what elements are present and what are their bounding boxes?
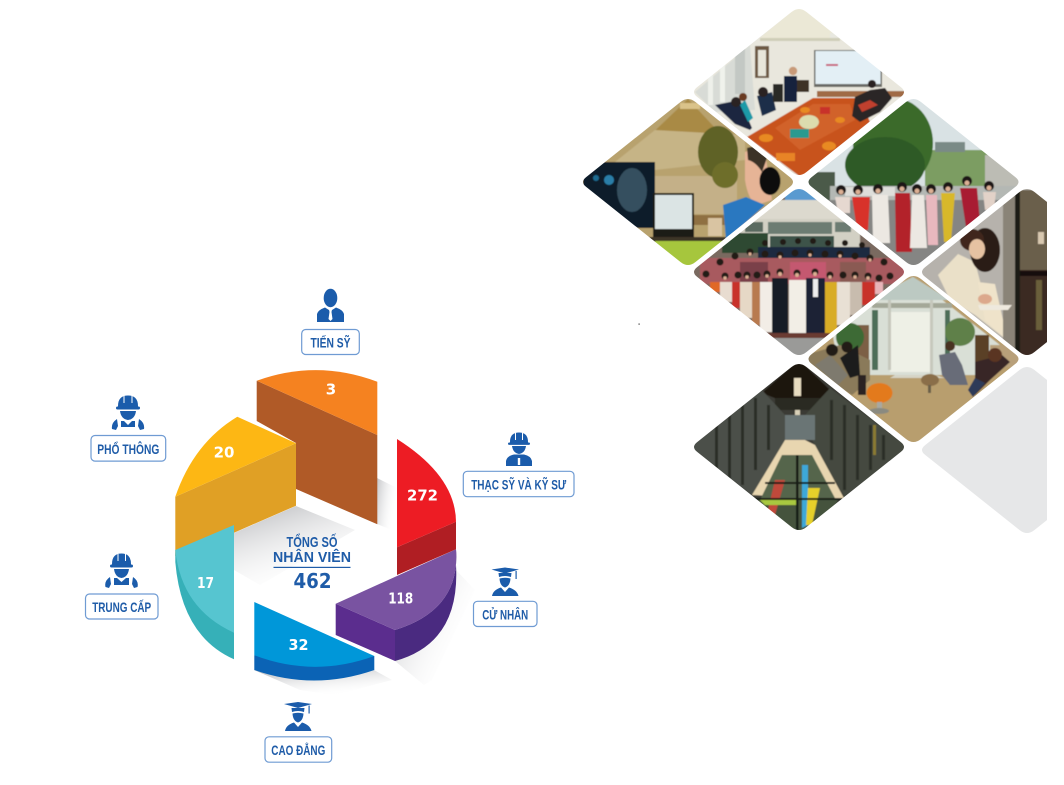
photo collage [583, 9, 1047, 533]
center total: NHÂN VIÊN [273, 548, 351, 566]
photo: staff group portrait [690, 185, 910, 360]
photo: meeting room [694, 9, 904, 175]
label: TIẾN SỸ [310, 334, 351, 350]
label: PHỔ THÔNG [97, 440, 159, 457]
segment: Trung cấp (teal) [175, 525, 234, 659]
label: CAO ĐẲNG [271, 741, 325, 758]
category: Cao đẳng [265, 702, 332, 762]
icon: graduate with cap [284, 702, 312, 731]
segment: Phổ thông (yellow) [175, 417, 296, 556]
segment: Tiến sỹ (orange) [257, 370, 377, 524]
category: Tiến sỹ [302, 289, 359, 354]
center total: TỔNG SỐ [286, 533, 338, 551]
category: Cử nhân [474, 568, 537, 626]
decorative grey diamond [922, 367, 1047, 533]
value labels: 20 [214, 444, 234, 462]
chart: employee totals by qualification [175, 370, 475, 695]
center total [273, 533, 351, 593]
segment: Cử nhân (purple) [336, 549, 456, 661]
category: Trung cấp [86, 554, 158, 619]
icon: worker with helmet [105, 554, 138, 588]
label: THẠC SỸ VÀ KỸ SƯ [471, 476, 566, 492]
icon: worker with helmet [112, 396, 144, 430]
value labels: 118 [388, 590, 413, 608]
value labels: 272 [407, 486, 438, 504]
photo: glass atrium café [808, 276, 1018, 442]
photo: women in ao dai under a tree [808, 99, 1018, 265]
segment: Thạc sỹ và kỹ sư (red) [397, 439, 456, 575]
shadows under the segments [234, 478, 475, 695]
icon: man in suit [317, 289, 344, 322]
value labels: 32 [288, 636, 308, 654]
photo: man with headphones at monitors [583, 99, 793, 265]
icon: graduate with cap [492, 568, 519, 596]
segment: Cao đẳng (blue) [254, 602, 374, 680]
right page margin [1047, 0, 1064, 785]
photo: server corridor with glass floor [690, 360, 910, 535]
center total: 462 [294, 569, 332, 593]
value labels [197, 380, 438, 654]
category: Phổ thông [91, 396, 166, 461]
category: Thạc sỹ và kỹ sư [463, 432, 574, 497]
photo: staff in the archive room [922, 189, 1047, 355]
value labels: 17 [197, 574, 214, 592]
icon: engineer with helmet [506, 432, 532, 466]
label: CỬ NHÂN [482, 605, 528, 622]
value labels: 3 [326, 380, 336, 398]
small dot [638, 324, 640, 325]
label: TRUNG CẤP [92, 599, 151, 615]
